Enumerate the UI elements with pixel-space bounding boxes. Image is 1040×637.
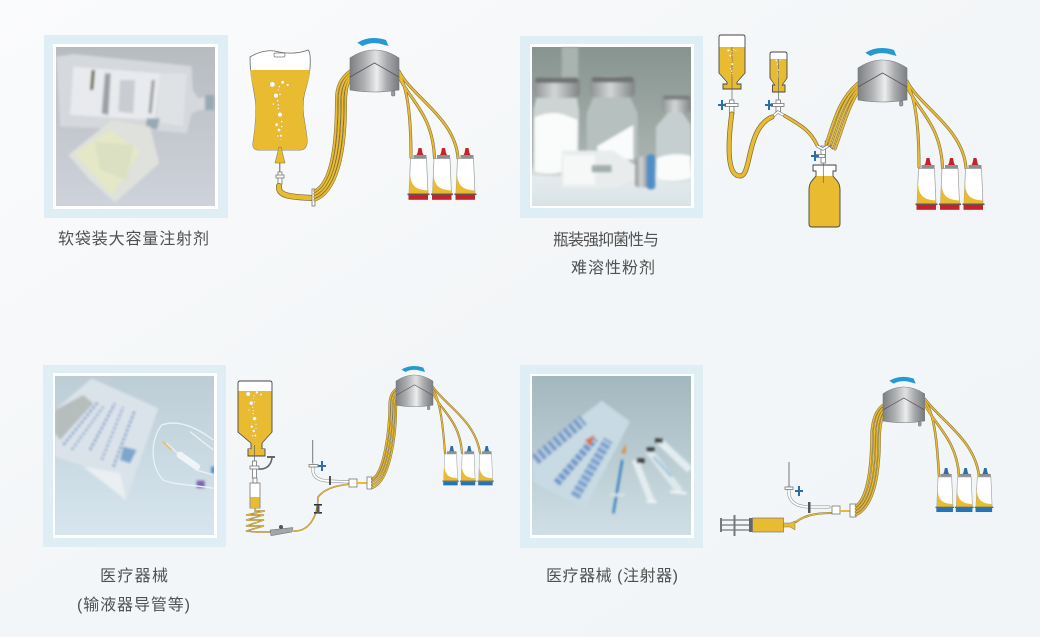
tube: left vial loop [729, 114, 772, 176]
icon: target bottle [809, 141, 840, 227]
icon: valve left [718, 100, 738, 114]
diagram: infusion set to filter system [238, 366, 494, 536]
icon: pump head with rotation arrow [858, 48, 907, 106]
panel: soft bag injection [44, 35, 476, 248]
tubes: pump to blue capsules [433, 387, 480, 453]
icon: inverted small vial [770, 52, 787, 108]
icon: valve right with Y joint [765, 100, 785, 117]
panel: vial powder injection [520, 35, 984, 277]
photo caption: medical devices line 1: 医疗器械 [100, 567, 168, 585]
icons: blue capsule filters [442, 446, 494, 485]
tube: syringe to connector [796, 513, 832, 522]
icon: pump head with rotation arrow [396, 366, 433, 410]
diagram: bag to filter system [250, 38, 476, 206]
tubes: pump to blue capsules [925, 399, 979, 476]
photo caption: soft bag: 软袋装大容量注射剂 [58, 230, 209, 248]
photo frame: syringes [520, 365, 703, 548]
tubes: pump to red capsules [399, 71, 458, 158]
icon: pump head with rotation arrow [883, 377, 925, 426]
diagram: syringe to filter system [720, 377, 993, 536]
tubes: pump to red capsules [907, 81, 966, 168]
tube: clamp to connector [293, 484, 352, 531]
icons: red capsule filters [916, 158, 984, 210]
tubes: manifold to pump [372, 389, 398, 488]
photo caption: vial line 2: 难溶性粉剂 [571, 259, 655, 277]
icon: inverted infusion bottle [238, 381, 272, 462]
photo caption: medical devices line 2: (输液器导管等) [77, 596, 190, 614]
icons: blue capsule filters [936, 468, 993, 512]
icon: inverted large vial [719, 35, 745, 110]
tube: bag to manifold [279, 186, 315, 206]
diagram: vial reconstitution to filter system [718, 35, 984, 227]
icon: vent needle and connector [309, 440, 372, 489]
photo caption: vial line 1: 瓶装强抑菌性与 [553, 231, 659, 249]
photo caption: syringes: 医疗器械 (注射器) [546, 567, 678, 585]
tubes: manifold to pump [856, 405, 884, 515]
panel: syringes [520, 365, 993, 585]
tube: right vial to target vial [785, 116, 817, 145]
tubes: target bottle to pump [826, 83, 858, 149]
photo frame: vials [520, 36, 703, 218]
icon: syringe [720, 515, 795, 536]
icon: infusion bag [250, 50, 310, 184]
photo frame: infusion sets [43, 365, 226, 547]
icon: vent needle and connector [785, 462, 856, 517]
tube: coil and roller clamp [246, 508, 293, 536]
icons: red capsule filters [408, 148, 476, 200]
panel: infusion sets [43, 365, 494, 614]
icon: air vent and drip chamber [250, 456, 275, 508]
tubes: manifold to pump [315, 71, 350, 200]
photo frame: soft bags [44, 35, 228, 218]
icon: pump head with rotation arrow [350, 38, 399, 96]
